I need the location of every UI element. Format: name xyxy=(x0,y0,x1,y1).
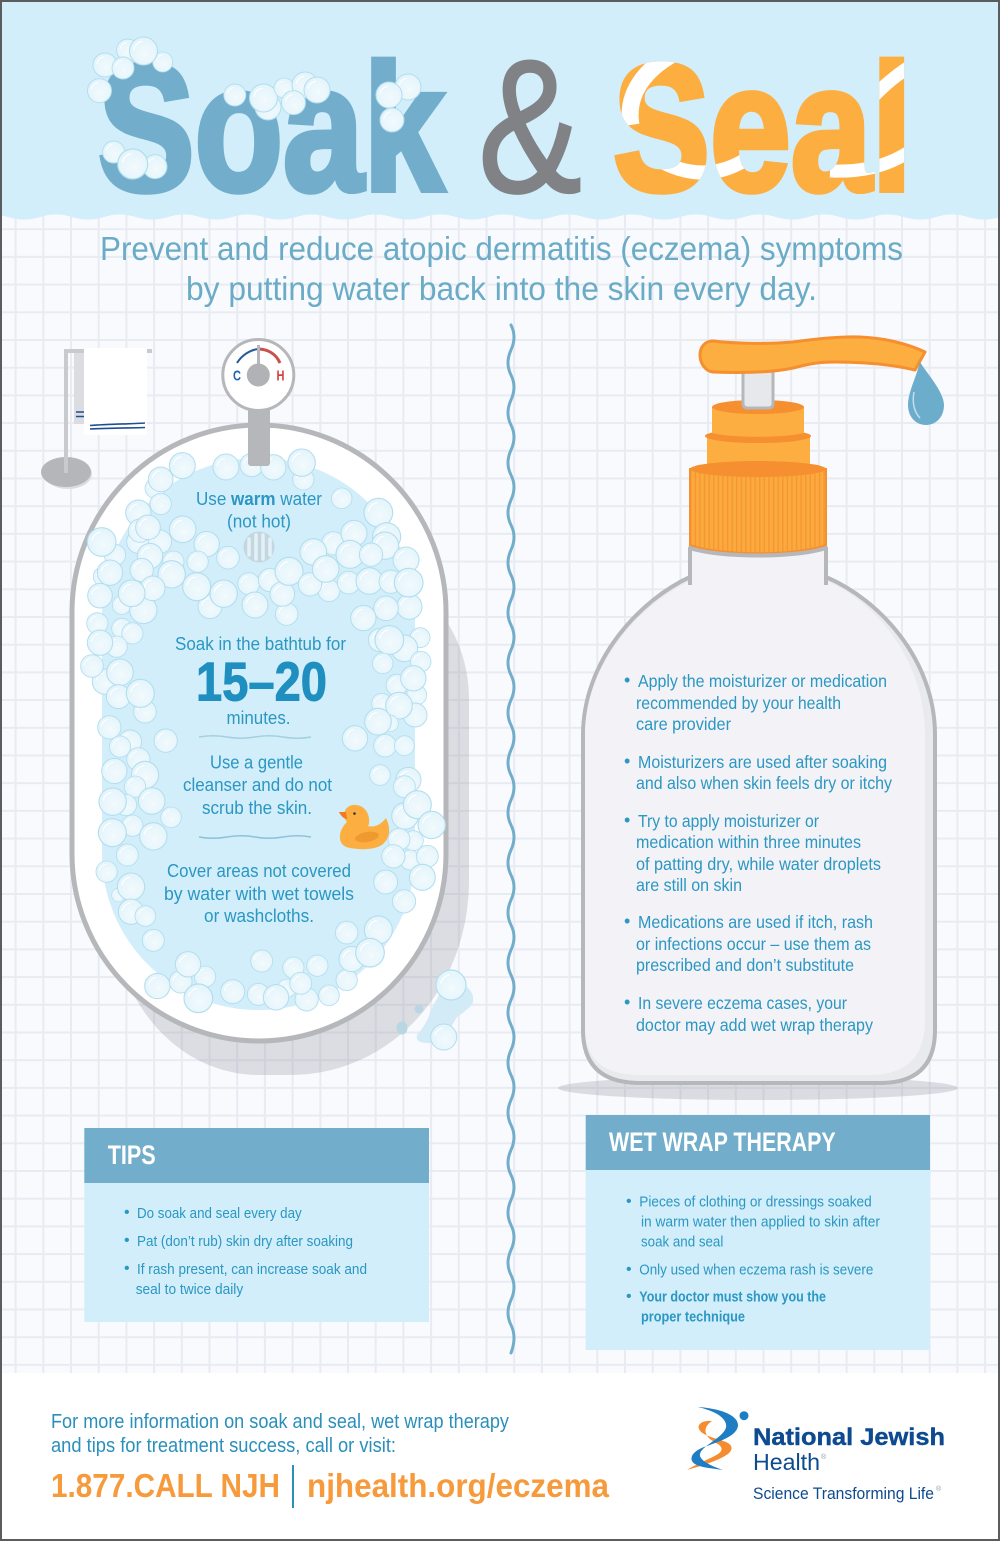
tub body xyxy=(72,425,446,1041)
title word: ampersand: & xyxy=(478,21,582,233)
seal wrap bands xyxy=(630,46,915,173)
icon: drop xyxy=(908,362,944,425)
logo: National Jewish Health: Health xyxy=(753,1449,820,1475)
subtitle: Prevent and reduce atopic dermatitis (eczema) symptoms xyxy=(100,230,903,267)
bottle text list: • xyxy=(624,992,630,1012)
logo wordmark: National Jewish xyxy=(753,1424,945,1451)
logo mark xyxy=(687,1407,748,1470)
bottle text list: Moisturizers are used after soaking xyxy=(638,752,887,772)
tips list: Do soak and seal every day xyxy=(137,1205,302,1222)
tips list xyxy=(124,1204,367,1298)
bottle text list: Apply the moisturizer or medication xyxy=(638,671,887,691)
background grid xyxy=(0,200,1000,1375)
footer contact text xyxy=(51,1411,610,1508)
bottle text list: of patting dry, while water droplets xyxy=(636,854,881,874)
footer contact text: 1.877.CALL NJH xyxy=(51,1467,280,1504)
icon: towel rack xyxy=(41,348,152,489)
tips list: • xyxy=(124,1260,130,1277)
logo: National Jewish Health: ® xyxy=(821,1453,827,1461)
wet wrap list: soak and seal xyxy=(641,1234,723,1251)
tub text: warm water: Use warm water xyxy=(196,489,322,509)
wave separator xyxy=(199,736,311,738)
wet wrap list: Your doctor must show you the xyxy=(639,1289,826,1306)
cap top tier xyxy=(712,400,804,437)
wet wrap list: Pieces of clothing or dressings soaked xyxy=(639,1194,872,1211)
wet wrap list: proper technique xyxy=(641,1309,745,1326)
icon: drain xyxy=(244,532,274,562)
bottle shadow xyxy=(558,1076,958,1100)
bottle text list: Try to apply moisturizer or xyxy=(638,811,819,831)
wave separator xyxy=(199,836,311,838)
wet wrap list: Only used when eczema rash is severe xyxy=(639,1261,873,1278)
bottle text list: doctor may add wet wrap therapy xyxy=(636,1015,873,1035)
panel: bathtub xyxy=(72,340,473,1075)
bottle text list: • xyxy=(624,670,630,690)
tub water xyxy=(102,458,415,1010)
icon: rubber duck xyxy=(339,805,389,849)
title word: Seal: Seal xyxy=(613,28,912,229)
panel: wet wrap therapy xyxy=(586,1115,930,1350)
tips list: If rash present, can increase soak and xyxy=(137,1261,367,1278)
bottle text list: medication within three minutes xyxy=(636,832,861,852)
bottle text list: and also when skin feels dry or itchy xyxy=(636,773,892,793)
logo tagline: Science Transforming Life xyxy=(753,1484,934,1503)
tub text: wet towels: Cover areas not covered xyxy=(167,861,351,881)
pump stem xyxy=(743,365,773,408)
bottle neck ring xyxy=(690,548,826,556)
bottle text list: are still on skin xyxy=(636,875,742,895)
bottle text list xyxy=(624,670,892,1035)
tub text: cleanser: scrub the skin. xyxy=(202,798,312,818)
tub text: cleanser: Use a gentle xyxy=(210,752,303,772)
icon: faucet with temperature dial: C xyxy=(233,368,241,384)
subtitle: by putting water back into the skin every day. xyxy=(186,270,817,307)
tips heading: TIPS xyxy=(108,1140,156,1170)
footer contact text: njhealth.org/eczema xyxy=(307,1467,610,1504)
tub text: cleanser xyxy=(183,752,332,818)
neck lines xyxy=(690,550,826,585)
wet wrap list: • xyxy=(626,1288,632,1305)
bottle text list: prescribed and don’t substitute xyxy=(636,955,854,975)
tips list: • xyxy=(124,1232,130,1249)
title bubbles xyxy=(88,37,421,179)
footer background xyxy=(0,1373,1000,1541)
tub shadow xyxy=(110,560,469,1075)
tub text: warm water: (not hot) xyxy=(227,512,291,532)
tub text: wet towels: or washcloths. xyxy=(204,906,314,926)
bottle text list: or infections occur – use them as xyxy=(636,934,871,954)
title word: Soak: Soak xyxy=(98,28,445,229)
bottle text list: • xyxy=(624,751,630,771)
splash on floor xyxy=(396,970,473,1050)
subtitle xyxy=(100,230,903,307)
wet wrap list: • xyxy=(626,1261,632,1278)
bottle text list: care provider xyxy=(636,714,731,734)
wet wrap header xyxy=(586,1115,930,1170)
logo: National Jewish Health: ® xyxy=(936,1485,942,1493)
wavy divider xyxy=(508,325,514,1353)
logo: National Jewish Health xyxy=(687,1407,945,1503)
tub text: warm water xyxy=(196,489,322,532)
tips header xyxy=(84,1128,429,1183)
tub bubbles xyxy=(81,449,445,1013)
tub text: soak duration xyxy=(175,634,346,728)
wet wrap list xyxy=(626,1193,880,1326)
wet wrap list: • xyxy=(626,1193,632,1210)
icon: pump head and cap xyxy=(690,337,925,556)
tips list: seal to twice daily xyxy=(136,1281,244,1298)
footer contact text: For more information on soak and seal, wet wrap therapy xyxy=(51,1411,509,1433)
cap collar xyxy=(690,461,826,553)
tips list: Pat (don’t rub) skin dry after soaking xyxy=(137,1233,353,1250)
tub text: cleanser: cleanser and do not xyxy=(183,775,332,795)
icon: faucet with temperature dial xyxy=(223,340,294,466)
bottle text list: • xyxy=(624,810,630,830)
tub text: soak duration: 15–20 xyxy=(196,650,327,712)
header band with wavy edge xyxy=(0,0,1000,220)
bottle highlight xyxy=(585,550,925,1075)
title xyxy=(87,36,904,195)
tips list: • xyxy=(124,1204,130,1221)
tub text: soak duration: Soak in the bathtub for xyxy=(175,634,346,654)
tub text: soak duration: minutes. xyxy=(226,708,290,728)
panel: tips xyxy=(84,1128,429,1322)
bottle text list: Medications are used if itch, rash xyxy=(638,912,873,932)
bottle text list: • xyxy=(624,911,630,931)
wet wrap heading: WET WRAP THERAPY xyxy=(609,1127,836,1157)
icon: faucet with temperature dial: H xyxy=(276,368,284,384)
bottle body xyxy=(583,548,935,1083)
cap middle tier xyxy=(705,429,811,470)
wet wrap list: in warm water then applied to skin after xyxy=(641,1214,880,1231)
bottle text list: recommended by your health xyxy=(636,693,841,713)
pump nozzle xyxy=(700,337,925,373)
footer contact text: and tips for treatment success, call or visit: xyxy=(51,1435,396,1457)
bottle text list: In severe eczema cases, your xyxy=(638,993,847,1013)
panel: moisturizer bottle xyxy=(558,337,958,1100)
tub text: wet towels: by water with wet towels xyxy=(164,884,354,904)
tub text: wet towels xyxy=(164,861,354,926)
